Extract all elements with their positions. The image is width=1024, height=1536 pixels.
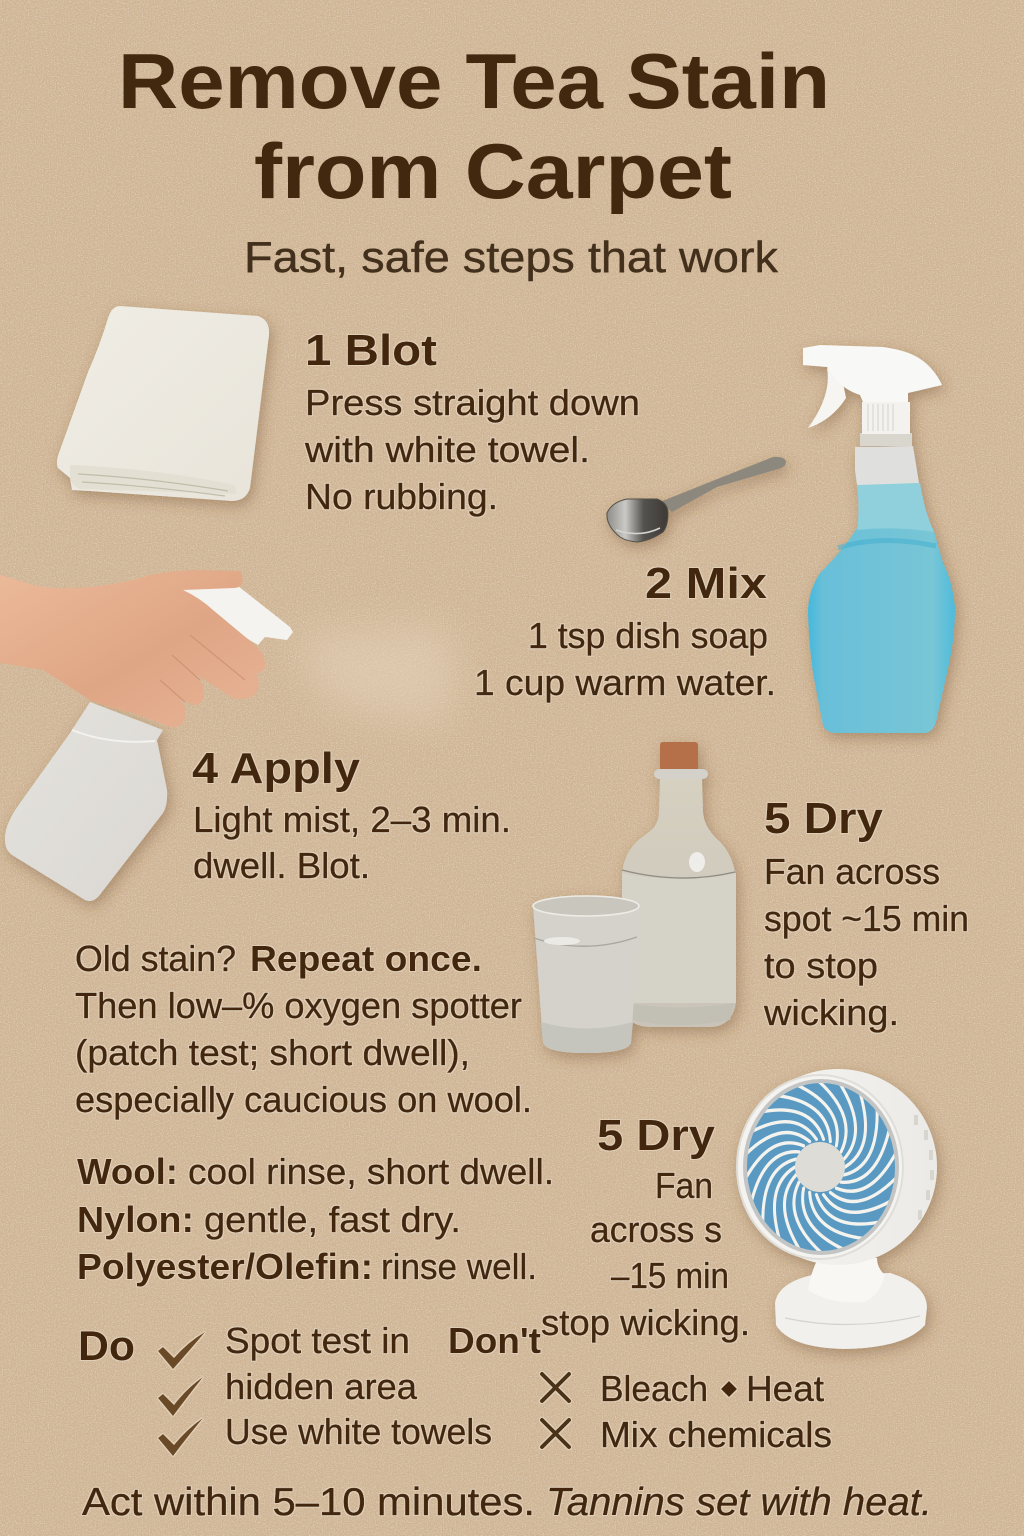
icon: folded white towel: [57, 306, 269, 501]
old stain note: Then low–% oxygen spotter: [75, 985, 522, 1026]
do items: Spot test in: [225, 1320, 410, 1361]
icon: measuring spoon: [607, 457, 786, 542]
fibre notes: cool rinse, short dwell.: [188, 1151, 554, 1192]
step 5: dry (upper): Fan across: [764, 851, 940, 892]
title: [118, 37, 830, 215]
front face: [737, 1075, 903, 1259]
base: [775, 1273, 927, 1349]
step 5: dry (upper): [763, 794, 969, 1033]
step 4: apply: 4 Apply: [192, 744, 361, 793]
step 5: dry (lower): –15 min: [611, 1255, 729, 1296]
grille ribs: [747, 1083, 895, 1251]
step 5: dry (upper): wicking.: [763, 992, 899, 1033]
don't list: Mix chemicals: [600, 1414, 832, 1455]
step 1: blot: Press straight down: [305, 382, 640, 423]
step 5: dry (upper): spot ~15 min: [764, 898, 969, 939]
spray head: [803, 345, 942, 402]
step 1: blot: 1 Blot: [305, 326, 437, 375]
fibre notes: Polyester/Olefin:: [77, 1246, 373, 1287]
footer tip: Act within 5–10 minutes.: [82, 1481, 535, 1524]
fibre notes: Nylon:: [77, 1199, 194, 1240]
collar: [862, 402, 910, 434]
step 4: apply: [192, 744, 511, 886]
trigger: [808, 368, 846, 428]
step 1: blot: No rubbing.: [305, 476, 498, 517]
do heading: Do: [78, 1322, 135, 1369]
step 5: dry (upper): 5 Dry: [764, 794, 884, 843]
step 5: dry (lower): stop wicking.: [541, 1302, 750, 1343]
do list: Use white towels: [225, 1411, 492, 1452]
old stain note: [75, 938, 532, 1120]
white bottle: [5, 702, 167, 901]
title: from Carpet: [254, 127, 732, 215]
bottle body: [808, 528, 955, 733]
do list: [78, 1320, 492, 1456]
step 4: apply: Light mist, 2–3 min.: [193, 799, 511, 840]
icon: blue spray bottle: [803, 345, 955, 733]
step 1: blot: with white towel.: [304, 429, 590, 470]
check icons: [158, 1332, 205, 1456]
don't list: Heat: [746, 1368, 824, 1409]
mist spray: [292, 625, 455, 725]
head shell: [739, 1069, 937, 1265]
footer tip: Tannins set with heat.: [546, 1481, 932, 1524]
glass: [533, 898, 640, 1053]
don't items: Bleach: [600, 1368, 708, 1409]
cross icons: [542, 1374, 569, 1447]
do list: hidden area: [225, 1366, 418, 1407]
icon: hand with white spray bottle: [0, 570, 293, 901]
step 2: mix: 1 tsp dish soap: [528, 615, 768, 656]
don't list: [448, 1320, 832, 1455]
step 5: dry (lower): across s: [590, 1209, 722, 1250]
footer tip: [82, 1481, 932, 1524]
step 4: apply: dwell. Blot.: [193, 845, 370, 886]
hand: [0, 570, 265, 727]
fibre notes: [77, 1151, 554, 1287]
white spray head: [180, 586, 293, 645]
neck with lighter liquid: [857, 483, 934, 532]
don't heading: Don't: [448, 1320, 541, 1361]
step 2: mix: 1 cup warm water.: [474, 662, 776, 703]
fibre notes: rinse well.: [381, 1246, 537, 1287]
hub: [795, 1142, 845, 1192]
step 1: blot: [304, 326, 640, 517]
cork: [660, 742, 698, 772]
clear neck sleeve: [855, 446, 919, 485]
bottle: [622, 778, 736, 1027]
step 2: mix: [474, 559, 776, 703]
fibre notes: Wool:: [77, 1151, 178, 1192]
step 5: dry (upper): to stop: [764, 945, 878, 986]
title: Remove Tea Stain: [118, 37, 830, 125]
subtitle: Fast, safe steps that work: [244, 233, 779, 282]
old stain note: (patch test; short dwell),: [75, 1032, 470, 1073]
step 5: dry (lower): [541, 1111, 750, 1343]
fibre notes: gentle, fast dry.: [204, 1199, 461, 1240]
stand: [808, 1258, 885, 1302]
old stain note: especially caucious on wool.: [75, 1079, 532, 1120]
step 5: dry (lower): 5 Dry: [597, 1111, 716, 1160]
step 2: mix: 2 Mix: [645, 559, 768, 608]
old stain note: Repeat once.: [250, 938, 482, 979]
step 5: dry (lower): Fan: [655, 1165, 713, 1206]
icon: glass bottle and water glass: [533, 742, 736, 1053]
icon: desk fan: [736, 1069, 937, 1349]
old stain note: Old stain?: [75, 938, 236, 979]
